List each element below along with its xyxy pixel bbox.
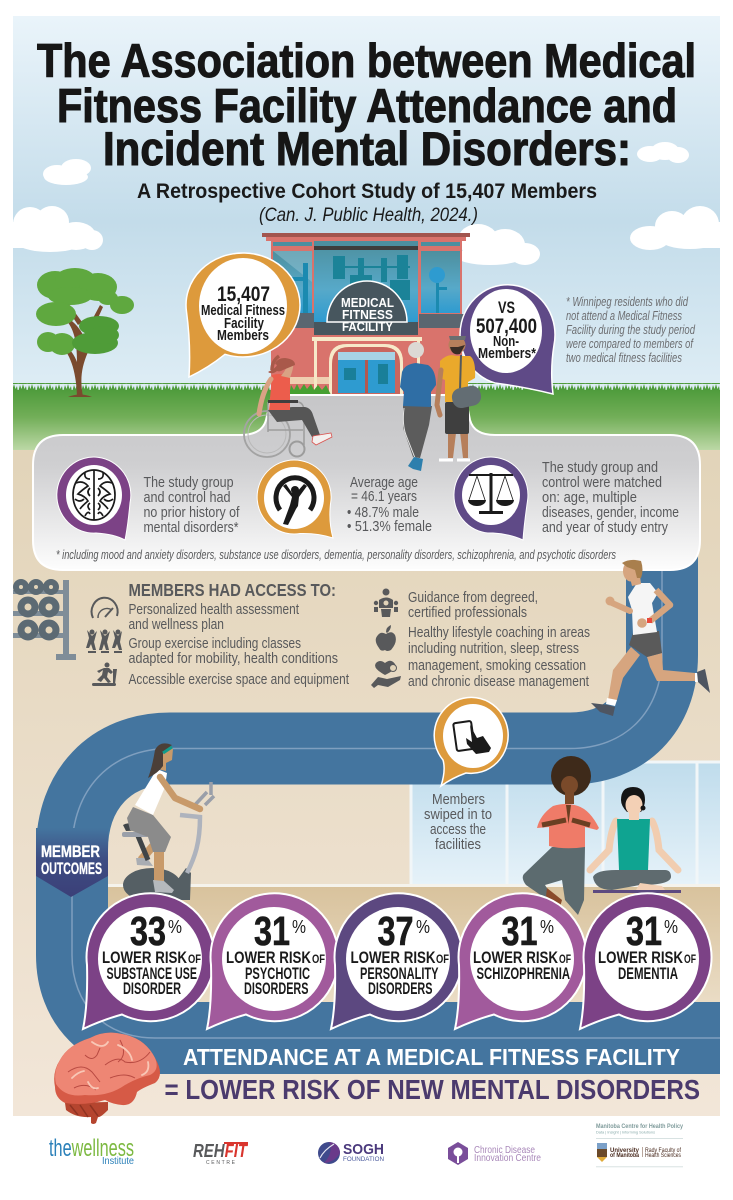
logo: the wellness institute <box>49 1135 134 1167</box>
text: demographics: = 46.1 years <box>351 489 417 505</box>
conclusion: attendance: ATTENDANCE AT A MEDICAL FITNESS FACILITY <box>183 1044 680 1070</box>
bubble: 15,407 members: Members <box>217 328 269 344</box>
text: demographics: • 48.7% male <box>347 505 419 521</box>
outcome: personality: % <box>416 917 430 937</box>
building <box>262 233 470 395</box>
text: no prior history: mental disorders* <box>144 520 239 536</box>
text: guidance <box>408 590 538 621</box>
logo: manitoba centre and university: Data | Insight | Informing Solutions <box>596 1130 655 1134</box>
brain illustration <box>54 1033 160 1124</box>
outcome: psychotic: DISORDERS <box>244 979 308 998</box>
outcome: dementia: 31 <box>626 908 662 954</box>
note: non-member definition <box>566 294 696 365</box>
text: demographics <box>347 475 432 535</box>
text: swiped in: facilities <box>435 837 481 853</box>
outcome: schizophrenia: OF <box>559 952 571 966</box>
text: group exercise: adapted for mobility, health conditions <box>128 651 338 667</box>
text: matched on: on: age, multiple <box>542 490 637 506</box>
logo: manitoba centre and university: Manitoba Centre for Health Policy <box>596 1124 684 1130</box>
grey path and study panel <box>33 395 700 570</box>
outcome: schizophrenia <box>455 893 587 1029</box>
facility sign: MEDICAL <box>341 295 394 310</box>
logo: chronic disease innovation centre: Chronic Disease <box>474 1145 535 1156</box>
outcome: personality <box>331 893 463 1029</box>
callout: swiped in <box>434 697 508 786</box>
clouds <box>13 142 720 265</box>
bubble: 15,407 members: Medical Fitness <box>201 303 285 319</box>
text: no prior history: and control had <box>144 490 230 506</box>
person: woman in wheelchair <box>244 356 332 457</box>
text: matched on: and year of study entry <box>542 520 669 536</box>
text: lifestyle coaching: management, smoking cessation <box>408 658 586 674</box>
text: demographics: Average age <box>350 475 418 491</box>
text: swiped in: Members <box>432 792 485 808</box>
outcome: personality: DISORDERS <box>368 979 432 998</box>
studio room <box>107 762 720 1002</box>
subtitle: A Retrospective Cohort Study of 15,407 Members <box>137 180 597 203</box>
facility sign <box>327 281 407 334</box>
bubble: vs 507,400 non-members: VS <box>498 298 515 317</box>
logo: sogh foundation: SOGH <box>343 1141 384 1158</box>
text: matched on <box>542 460 679 536</box>
outcome: psychotic: % <box>292 917 306 937</box>
banner: member outcomes: OUTCOMES <box>41 860 102 878</box>
outcome: personality: LOWER RISK <box>350 948 436 967</box>
outcome: psychotic: LOWER RISK <box>226 948 312 967</box>
person: cyclist <box>122 743 214 902</box>
center glass <box>314 241 418 322</box>
outcome: dementia: DEMENTIA <box>618 964 678 983</box>
outcome: psychotic <box>207 893 339 1029</box>
logo: the wellness institute: thewellness <box>49 1135 134 1162</box>
running track <box>72 545 720 1038</box>
outcome: substance use: LOWER RISK <box>102 948 188 967</box>
logo: manitoba centre and university: of Manitoba <box>610 1152 639 1159</box>
text: no prior history: The study group <box>144 475 234 491</box>
title <box>37 34 696 175</box>
banner: member outcomes <box>36 828 108 897</box>
text: lifestyle coaching <box>408 625 590 690</box>
bubble: 15,407 members: Facility <box>224 316 264 332</box>
banner: member outcomes: MEMBER <box>41 843 100 861</box>
logo: chronic disease innovation centre: Innovation Centre <box>474 1153 541 1164</box>
text: guidance: certified professionals <box>408 605 527 621</box>
person: man with gym bag <box>437 336 483 460</box>
outcome: personality: OF <box>436 952 449 966</box>
logo: sogh foundation <box>318 1141 384 1164</box>
bubble: vs 507,400 non-members: Non- <box>493 334 519 350</box>
person: older man <box>400 342 436 471</box>
logo: manitoba centre and university: University <box>610 1147 639 1154</box>
icon: weight rack <box>13 580 76 660</box>
icon bubble: scales <box>454 457 528 540</box>
logo: chronic disease innovation centre <box>448 1142 541 1165</box>
text: health assessment <box>128 602 299 633</box>
person: runner <box>591 560 710 716</box>
outcome: psychotic: OF <box>312 952 325 966</box>
bubble: 15,407 members <box>186 253 300 377</box>
left window <box>273 251 312 313</box>
text: swiped in <box>424 792 492 853</box>
icon: treadmill <box>92 662 117 686</box>
outcome: dementia: LOWER RISK <box>598 948 684 967</box>
text: matched on: The study group and <box>542 460 658 476</box>
text: matched on: control were matched <box>542 475 662 491</box>
outcome: substance use: % <box>168 917 182 937</box>
bubble: 15,407 members: 15,407 <box>217 283 270 306</box>
tree <box>36 268 134 397</box>
outcome: psychotic: 31 <box>254 908 290 954</box>
outcome: substance use: 33 <box>130 908 166 954</box>
outcome: schizophrenia: LOWER RISK <box>473 948 559 967</box>
outcome: personality: PERSONALITY <box>360 964 439 983</box>
logo: manitoba centre and university: Rady Faculty of <box>645 1148 681 1154</box>
outcome: substance use: OF <box>188 952 201 966</box>
sand ground <box>13 450 720 1116</box>
outcome: substance use <box>83 893 215 1029</box>
text: health assessment: Personalized health assessment <box>128 602 299 618</box>
text: health assessment: and wellness plan <box>128 617 224 633</box>
entrance <box>312 337 422 395</box>
outcome: schizophrenia: SCHIZOPHRENIA <box>476 964 570 983</box>
text: swiped in: swiped in to <box>424 807 492 823</box>
dark bands <box>271 313 468 328</box>
text: lifestyle coaching: Healthy lifestyle coaching in areas <box>408 625 590 641</box>
bubble: vs 507,400 non-members: 507,400 <box>476 315 537 338</box>
outcome: dementia <box>580 893 712 1029</box>
text: no prior history: no prior history of <box>144 505 240 521</box>
facility sign: FITNESS <box>342 307 393 322</box>
icon: heart and hand <box>371 661 401 688</box>
facility sign: FACILITY <box>342 319 393 334</box>
shrubs <box>289 384 331 395</box>
icon: apple <box>376 625 396 651</box>
heading: members had access to: MEMBERS HAD ACCESS TO: <box>128 580 336 600</box>
bubble: vs 507,400 non-members: Members* <box>478 346 536 362</box>
text: guidance: Guidance from degreed, <box>408 590 538 606</box>
text: lifestyle coaching: including nutrition, sleep, stress <box>408 641 579 657</box>
text: exercise space: Accessible exercise space and equipment <box>128 672 349 688</box>
icon: professionals <box>374 588 398 617</box>
outcome: psychotic: PSYCHOTIC <box>245 964 310 983</box>
note: non-member definition: two medical fitness facilities <box>566 350 682 365</box>
logo: manitoba centre and university <box>596 1124 684 1167</box>
text: no prior history <box>144 475 240 536</box>
text: group exercise: Group exercise including classes <box>128 636 301 652</box>
outcome: dementia: OF <box>684 952 696 966</box>
outcome: personality: 37 <box>378 908 414 954</box>
person: woman meditating <box>590 787 681 893</box>
icon bubble: person <box>257 460 333 538</box>
note: non-member definition: * Winnipeg residents who did <box>566 294 689 309</box>
title: Incident Mental Disorders: <box>103 122 631 175</box>
text: group exercise <box>128 636 338 667</box>
logo: rehfit centre: CENTRE <box>206 1160 236 1166</box>
logo: sogh foundation: FOUNDATION <box>343 1156 384 1163</box>
outcome: substance use: SUBSTANCE USE <box>106 964 197 983</box>
bubble: vs 507,400 non-members <box>460 285 555 394</box>
right window <box>421 251 460 313</box>
outcome: dementia: % <box>664 917 678 937</box>
person: woman in tree pose <box>523 756 599 915</box>
outcome: schizophrenia: 31 <box>502 908 538 954</box>
logo: rehfit centre: REHFIT <box>193 1141 249 1161</box>
text: matched on: diseases, gender, income <box>542 505 679 521</box>
grass <box>13 383 720 450</box>
icon: gauge <box>92 598 118 618</box>
outcome: schizophrenia: % <box>540 917 554 937</box>
icon: group exercise <box>86 630 122 653</box>
icon bubble: brain <box>57 457 131 540</box>
text: swiped in: access the <box>430 822 486 838</box>
text: lifestyle coaching: and chronic disease management <box>408 674 589 690</box>
text: demographics: • 51.3% female <box>347 519 432 535</box>
logo: manitoba centre and university: Health Sciences <box>645 1153 681 1159</box>
citation: (Can. J. Public Health, 2024.) <box>259 205 478 226</box>
logo: the wellness institute: Institute <box>102 1156 134 1167</box>
outcome: substance use: DISORDER <box>123 979 181 998</box>
note: non-member definition: not attend a Medical Fitness <box>566 308 682 323</box>
background: sky <box>13 16 720 391</box>
